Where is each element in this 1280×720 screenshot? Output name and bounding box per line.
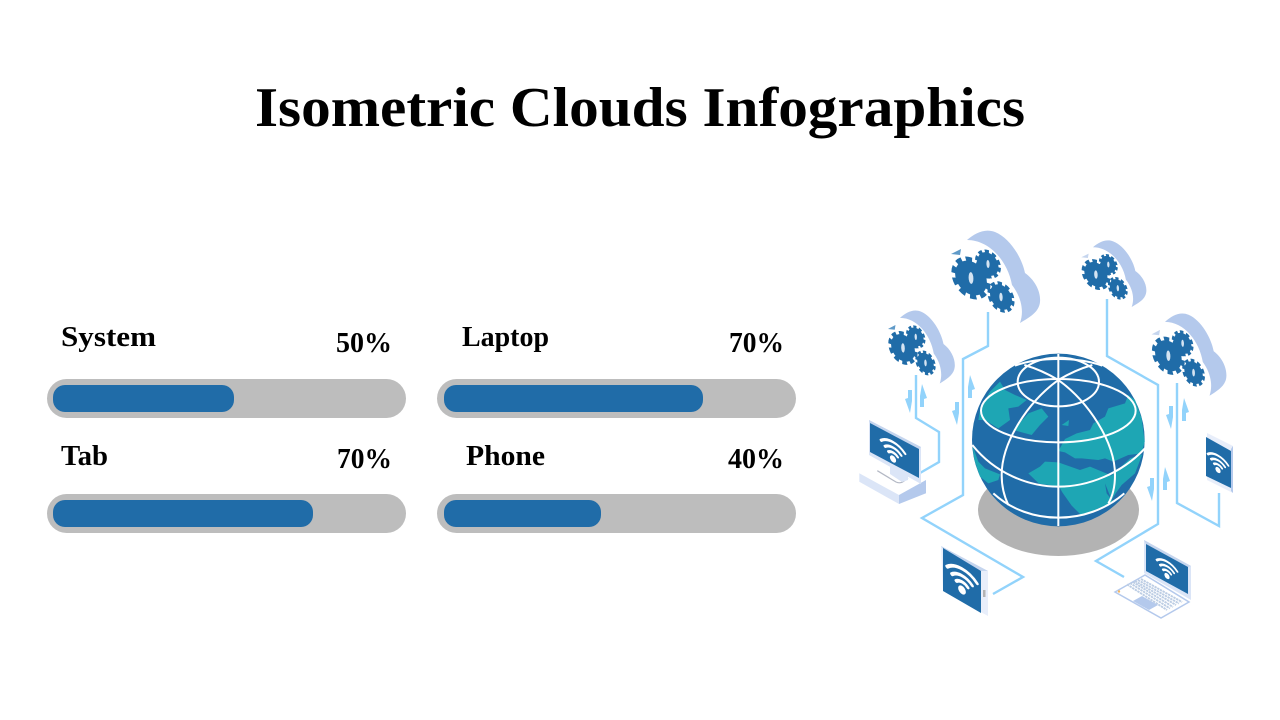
progress item: Phone 40% xyxy=(437,441,796,533)
progress item: System 50%: System xyxy=(61,322,156,353)
device: phone xyxy=(1206,433,1233,493)
progress item: Phone 40%: Phone xyxy=(466,441,545,472)
continents xyxy=(972,382,1145,516)
cloud: small top right xyxy=(1081,240,1146,307)
device: desktop computer xyxy=(859,420,926,504)
progress item: Tab 70% xyxy=(47,441,406,533)
cloud: right xyxy=(1152,314,1226,396)
progress item: Tab 70%: 70% xyxy=(337,444,392,475)
globe shadow xyxy=(978,464,1139,556)
title: Isometric Clouds Infographics xyxy=(255,77,1025,139)
grid lines xyxy=(972,354,1145,526)
progress item: Tab 70%: Tab xyxy=(61,441,108,472)
progress item: Laptop 70%: Laptop xyxy=(462,322,549,353)
cloud: large top left xyxy=(951,231,1040,323)
arrows xyxy=(905,375,1189,501)
cloud: small left xyxy=(888,310,955,383)
globe xyxy=(972,354,1145,526)
progress item: System 50% xyxy=(47,322,406,418)
progress item: Laptop 70% xyxy=(437,322,796,418)
device: tablet xyxy=(941,546,988,616)
progress item: Laptop 70%: 70% xyxy=(729,328,784,359)
panel: progress bars xyxy=(47,322,796,533)
device: laptop xyxy=(1115,540,1191,618)
progress item: Phone 40%: 40% xyxy=(728,444,784,475)
connector lines xyxy=(916,299,1219,594)
isometric illustration xyxy=(859,231,1233,618)
progress item: System 50%: 50% xyxy=(336,328,392,359)
